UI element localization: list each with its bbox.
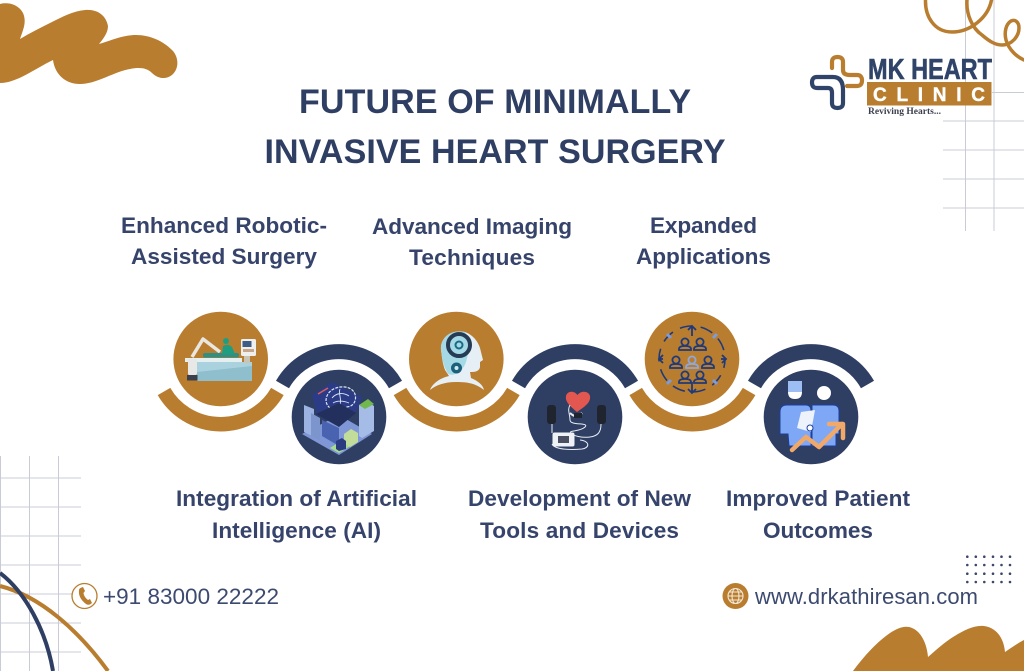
navy circle bbox=[292, 370, 386, 464]
phone number: +91 83000 22222 bbox=[103, 584, 279, 609]
logo cross icon bbox=[812, 57, 862, 108]
step 4: new tools and devices bbox=[518, 352, 632, 464]
icon: people network bbox=[659, 326, 726, 393]
logo: MK Heart Clinic bbox=[812, 54, 992, 117]
label: integration of artificial intelligence: Intelligence (AI) bbox=[212, 518, 381, 543]
label: advanced imaging techniques: Advanced Imaging bbox=[372, 214, 572, 239]
logo wordmark: MK HEART bbox=[868, 54, 992, 86]
label: integration of artificial intelligence: Integration of Artificial bbox=[176, 486, 417, 511]
decorative curl: top right bbox=[925, 0, 1024, 60]
label: integration of artificial intelligence bbox=[176, 486, 417, 543]
icon: AI head bbox=[430, 331, 484, 390]
navy circle bbox=[528, 370, 622, 464]
icon: robotic surgery bbox=[185, 338, 256, 381]
icon: heart device bbox=[547, 392, 606, 449]
label: improved patient outcomes: Outcomes bbox=[763, 518, 873, 543]
gold arc bbox=[400, 392, 513, 424]
decorative curves: bottom left bbox=[0, 573, 108, 671]
navy arc bbox=[754, 352, 868, 384]
decorative blob: top left bbox=[0, 3, 177, 84]
gold arc bbox=[164, 392, 277, 424]
label: enhanced robotic-assisted surgery bbox=[121, 213, 327, 269]
label: advanced imaging techniques bbox=[372, 214, 572, 270]
icon: doctors and rising arrow bbox=[780, 381, 843, 450]
step 2: artificial intelligence bbox=[282, 352, 396, 464]
label: expanded applications bbox=[636, 213, 771, 269]
icon: phone bbox=[72, 584, 97, 608]
decorative blob: bottom right bbox=[853, 626, 1024, 671]
step 5: expanded applications bbox=[636, 312, 749, 424]
title: INVASIVE HEART SURGERY bbox=[264, 133, 726, 171]
label: expanded applications: Applications bbox=[636, 244, 771, 269]
label: development of new tools and devices: Tools and Devices bbox=[480, 518, 679, 543]
gold circle bbox=[645, 312, 739, 406]
label: improved patient outcomes: Improved Patient bbox=[726, 486, 910, 511]
gold circle bbox=[173, 312, 268, 406]
label: expanded applications: Expanded bbox=[650, 213, 757, 238]
label: enhanced robotic-assisted surgery: Enhanced Robotic- bbox=[121, 213, 327, 238]
decorative dot grid bbox=[966, 555, 1011, 583]
title: FUTURE OF MINIMALLY bbox=[299, 83, 691, 121]
navy circle bbox=[764, 370, 858, 464]
title bbox=[264, 83, 726, 171]
step 3: advanced imaging bbox=[400, 312, 513, 424]
logo tagline: Reviving Hearts... bbox=[868, 107, 941, 117]
navy arc bbox=[518, 352, 632, 384]
label: development of new tools and devices bbox=[468, 486, 691, 543]
label: enhanced robotic-assisted surgery: Assisted Surgery bbox=[131, 244, 317, 269]
logo band text: CLINIC bbox=[873, 85, 985, 106]
website address: www.drkathiresan.com bbox=[754, 584, 978, 609]
label: advanced imaging techniques: Techniques bbox=[409, 245, 535, 270]
gold circle bbox=[409, 312, 504, 406]
step 1: robotic surgery bbox=[164, 312, 277, 424]
icon: globe bbox=[722, 583, 748, 609]
contact: website bbox=[722, 583, 978, 609]
label: improved patient outcomes bbox=[726, 486, 910, 543]
step 6: improved outcomes bbox=[754, 352, 868, 464]
gold arc bbox=[636, 392, 749, 424]
logo band bbox=[867, 82, 992, 106]
contact: phone bbox=[72, 584, 279, 609]
navy arc bbox=[282, 352, 396, 384]
icon: AI smart city bbox=[302, 382, 374, 455]
label: development of new tools and devices: Development of New bbox=[468, 486, 691, 511]
